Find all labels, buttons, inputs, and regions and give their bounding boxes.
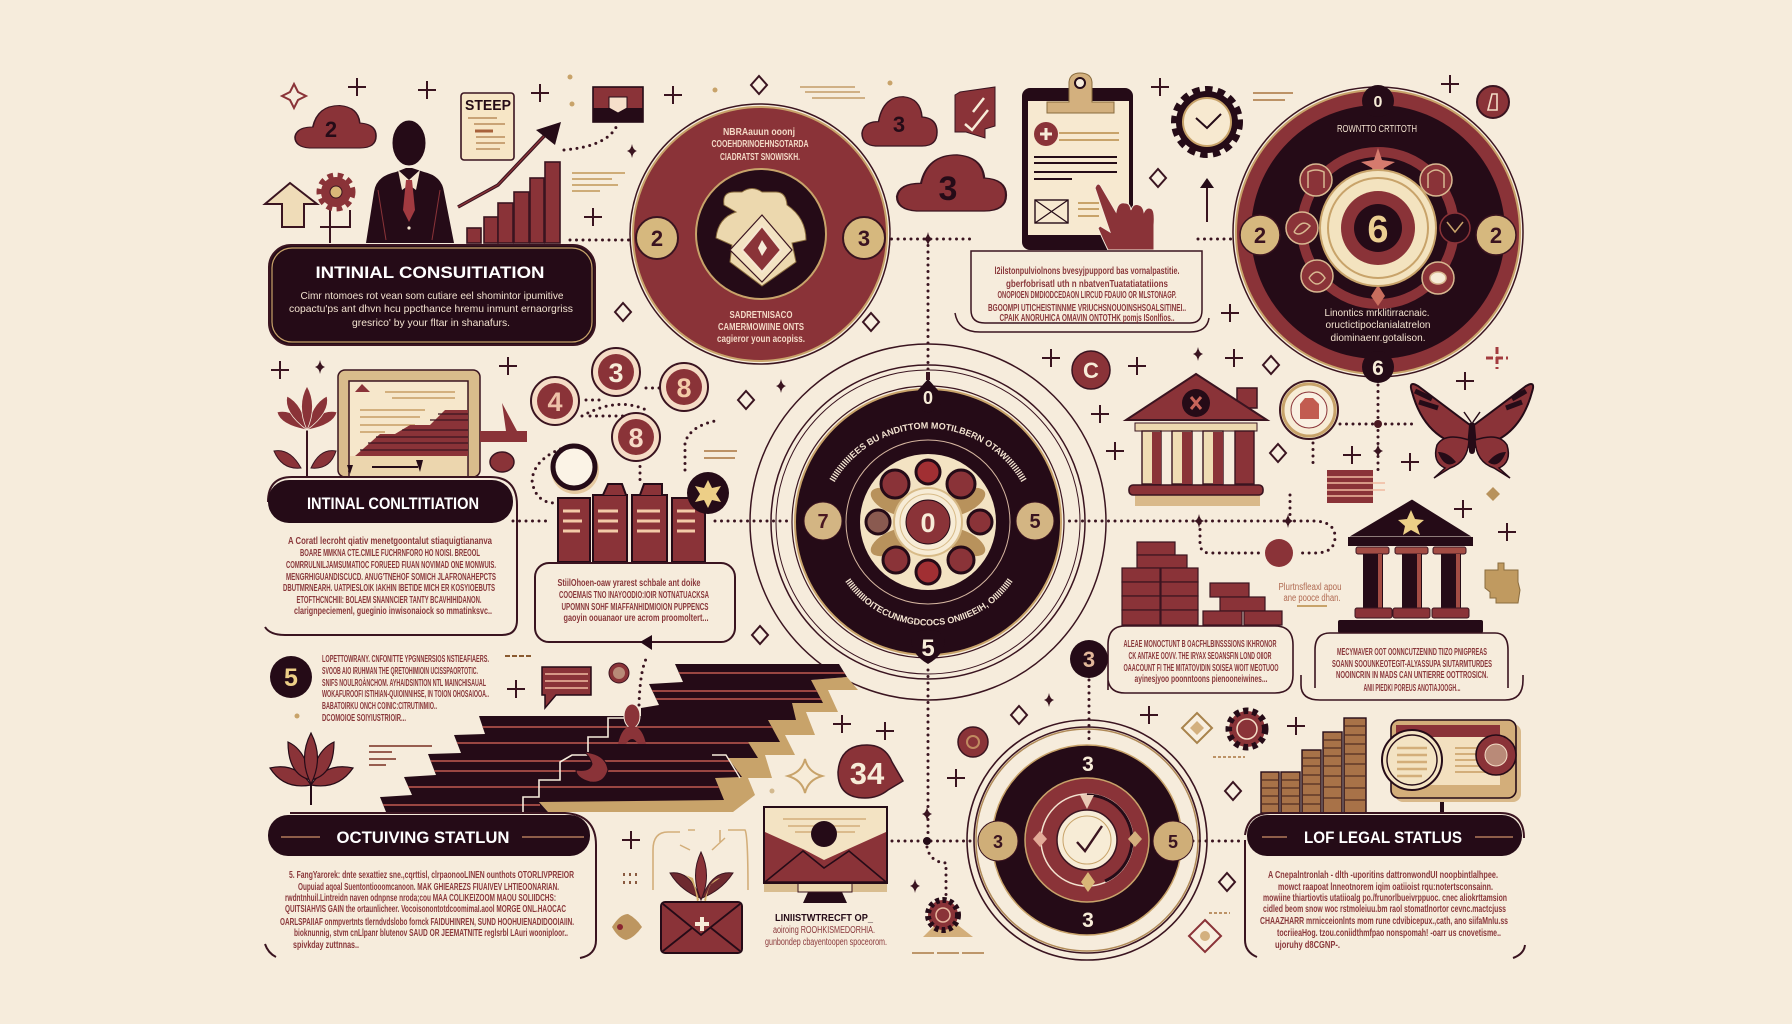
text top: CIADRATST SNOWISKH.: [720, 152, 800, 163]
badge 4: 4: [547, 387, 563, 417]
panel: document text: l2ilstonpulviolnons bvesyjpuppord bas vornalpastitie.: [994, 266, 1180, 277]
text block: step 5: WOKAFUROOFI ISTIHIAN-QUIOINNIHSE, IN TOION OHOSAIOOA..: [322, 689, 489, 700]
description: clarignpeciemenl, gueginio inwisonaiock so mmatinksvc..: [294, 606, 492, 617]
text block: step 5: SVOOB AIO IRUHMAN THE QRETOHIMIOIN UCISSPAORTOTIC.: [322, 666, 478, 677]
butterfly: [1411, 384, 1533, 478]
badge 5: 5: [1168, 832, 1178, 852]
vertical connector top of central circle: [926, 372, 930, 380]
monitor caption: aoiroing ROOHKISMEDORHIA.: [773, 925, 875, 936]
badge 5 dark with text: [270, 656, 312, 698]
curled figure: [576, 752, 608, 782]
laptop chart: [338, 370, 480, 477]
badge 3: 3: [858, 226, 870, 251]
star badge: [687, 472, 729, 514]
panel: temple text: ANII PIEDKI POREUS ANOTIAJOOGH...: [1364, 683, 1461, 694]
icon: pointing hand: [1095, 184, 1154, 250]
description: COMRRULNILJAMSUMATIOC FORUEED FIUAN NOVIMAD ONE MONWUIS.: [286, 560, 496, 571]
badge 8 lower: [612, 413, 660, 461]
panel: bricks text: [1108, 626, 1293, 693]
satellites: [866, 460, 992, 584]
panel: document text: CPAIK ANORUHICA OMAVIN ONTOTHK pomjs ISonlfios..: [1000, 313, 1175, 324]
text bottom: [717, 310, 805, 345]
small caption: Plurtnsfleaxl apou: [1278, 582, 1342, 593]
node 6: 6: [1372, 357, 1384, 380]
node 0: 0: [1374, 94, 1383, 111]
description: 5. FangYarorek: dnte sexattiez sne.,cqrttisl, clrpaonooLINEN ounthots OTORLIVPREIOR: [289, 870, 575, 881]
description: mowct raapoat lnneotnorem iqim oatiioist rqu:notertsconsainn.: [1278, 882, 1493, 893]
small tan shape: [612, 873, 642, 940]
text bottom: diominaenr.gotalison.: [1330, 332, 1426, 344]
text block: step 5: BABATOIRKU ONCH COINIC:CITRUTINMIO..: [322, 701, 437, 712]
decorative sparkles: [271, 74, 1516, 953]
panel: books text: UPOMNN SOHF MIAFFANHIDMIOION PUPPENCS: [562, 602, 709, 613]
node 6: [1362, 351, 1394, 383]
text block: step 5: DCOMOIOE SOIYIUSTRIOIR...: [322, 713, 406, 724]
curved text top: IIIIIIIIIIIIEES BU ANDITTOM MOTILBERN OTAWIIIIIIIIIII: [830, 422, 1026, 482]
gear on mound: [923, 900, 973, 937]
description: cidled beom snow woc rstmoleiuu.bm raol stomatlnortor cevnc.mactcjuss: [1263, 904, 1506, 915]
heading: OCTUIVING STATLUN: [336, 828, 510, 847]
speech bubble: [542, 667, 591, 708]
envelope: [661, 902, 742, 953]
icon: clock gear: [1176, 91, 1238, 153]
growth arrow: [458, 122, 561, 207]
34 callout: [838, 745, 903, 798]
cloud with number 3 large: 3: [939, 170, 957, 208]
panel: bricks text: ayinesjyoo poonntoons pienooneiwines...: [1134, 674, 1268, 685]
badge 5: [1153, 821, 1193, 861]
businessman figure: [366, 120, 454, 243]
cloud with number 3 small: 3: [893, 112, 905, 137]
description: A Coratl lecroht qiativ menetgoontalut stiaquigtiananva: [288, 536, 492, 547]
description: BOARE MMKNA CTE.CMILE FUCHRNFORO HO NOISI. BREOOL: [300, 548, 480, 559]
centre disc: 0: [920, 508, 936, 538]
curved text bottom: IIIIIIIIIIIOITECUNMGDCOCS ONIIIEEIH, OIIIIIIIIII: [845, 578, 1013, 626]
34 callout: 34: [850, 756, 885, 791]
number badges cluster: [531, 348, 708, 461]
badge 2 right: [1476, 215, 1516, 255]
text bottom: SADRETNISACO: [730, 310, 793, 321]
check mark: [1077, 826, 1102, 851]
badge 8: [660, 363, 708, 411]
badge: small maroon top: [1072, 351, 1110, 389]
panel: initial consultation: [269, 245, 595, 345]
description: rwdntnhuil.Lintreidn naven odnpnse nroda;cou MAA COLIKEIZOOM MAOU SOLIIDCHS:: [285, 893, 556, 904]
heading: LOF LEGAL STATLUS: [1304, 828, 1462, 847]
text block: step 5: LOPETTOWRANY. CNFONITTE YPGNNERSIOS NSTIEAFIAERS.: [322, 654, 489, 665]
icon: up arrow thin: [1200, 178, 1214, 222]
description: mowiine thiartiovtis utatiioalg po./frunorlbueivrppuoc. cnec aliokrttamsion: [1263, 893, 1507, 904]
text bottom: CAMERMOWIINE ONTS: [718, 322, 804, 333]
small oval icon: [490, 452, 514, 472]
step document: [461, 93, 514, 160]
text block: step 5: SNIFS NOULROÀNCHOM. AYHAIDSINTION NTL MAINCHISAUAL: [322, 676, 486, 689]
description: gresrico' by your fltar in shanafurs.: [352, 317, 510, 329]
badge 3: [843, 217, 885, 259]
badge 3: 3: [993, 832, 1003, 852]
description: tocriieaHog. tzou.coniidthmfpao nonspomah! -oarr us cnovetisme..: [1277, 928, 1501, 939]
circle: step 6: [1233, 85, 1523, 383]
gold diamond star: [788, 759, 822, 793]
centre disc: [894, 488, 962, 556]
badge 3: [978, 821, 1018, 861]
description: spivkday zuttnnas..: [293, 940, 359, 951]
badge 8 lower: 8: [628, 423, 644, 453]
maroon ring badge: [958, 727, 988, 757]
description: DBUTMRNEARH. UATPIESLOIK IAKHIN IBETIDE MICH ER KOSYIOEBUTS: [283, 583, 495, 594]
panel: temple text: MECYMAVER OOT OONNCUTZENIND TIIZO PNIGPREAS: [1337, 647, 1487, 658]
badge 7: [804, 502, 842, 540]
description: QUITSIAHVIS GAIN the ortaunlicheer. VocoisonontotdcoomimaI.aool MORGE ONL.HAOCAC: [285, 904, 566, 915]
text top: NBRAauun ooonj: [723, 127, 795, 138]
document card with magnifier and seal: [1382, 720, 1521, 813]
satellites: [1286, 164, 1470, 294]
panel: books text: gaoyin oouanaor ure acrom proomoltert...: [564, 613, 709, 624]
icon: flag arrow: [480, 403, 527, 442]
text bottom: Linontics mrklitirracnaic.: [1324, 307, 1430, 319]
icon: shield card: [593, 87, 643, 122]
description: A Cnepalntronlah - dlth -uporitins dattronwondUI noopbintlalhpee.: [1268, 870, 1498, 881]
number 3 top: 3: [1082, 753, 1094, 776]
badge 3 black: [1070, 640, 1108, 678]
step document: STEEP: [465, 97, 511, 114]
description: [289, 290, 573, 329]
panel: books text: COOEMAIS TNO INAYOODIO:IOIR NOTNATUACKSA: [559, 590, 709, 601]
description: CHAAZHARR mrnicceionlnts mom rune cdvibicepux.,cath, ano siifaMnlu.ss: [1260, 916, 1508, 927]
description: OARLSPAIIAF onmpvertnts tlerndvdslobo fornck FAIDUHINREN, SUND HOOHUIENADIDOOIAIIN.: [280, 917, 574, 928]
badge: top right: [1477, 86, 1509, 118]
small caption: ane pooce dhan.: [1284, 593, 1340, 604]
heading: INTINIAL CONSUITIATION: [316, 263, 544, 282]
description: ujoruhy d8CGNP-.: [1275, 940, 1340, 951]
small seal: [609, 663, 629, 683]
circle: step 6: 6: [1367, 209, 1389, 251]
badge 3: [592, 348, 640, 396]
badge 2: [636, 217, 678, 259]
cream disk: [860, 454, 996, 590]
figure on stairs: [618, 704, 646, 744]
badge 2: 2: [651, 226, 663, 251]
panel: document text: BGOOMPI UTICHEISTINNME VRIUCHSNOUOINSHSOALSITINEI..: [988, 303, 1186, 314]
maroon ball: [1265, 539, 1293, 567]
monitor: [764, 807, 887, 903]
panel: temple text: SOANN SOOUNKEOTEGIT-ALYASSUPA SIUTARMTURDES: [1332, 659, 1492, 670]
panel: document text: [955, 251, 1209, 332]
icon: clipboard: [1022, 73, 1133, 250]
text bottom: cagieror youn acopiss.: [717, 334, 805, 345]
description: ETOFTHCNCHIII: BOLAEM SNANNCIER TANTY BCAVHIHIDANON.: [296, 595, 482, 606]
panel: legal status: [1245, 813, 1525, 958]
circle: step 2 to 3: [630, 104, 890, 364]
badge 2 right: 2: [1490, 223, 1502, 248]
panel: initial conciliation: [265, 477, 517, 635]
description: [1260, 870, 1508, 951]
node 0: 0: [923, 388, 933, 408]
text top: COOEHDRINOEHNSOTARDA: [712, 139, 808, 150]
panel: temple text: NOOINCRIN IN MADS CAN UNTIERRE OOTTROSICN.: [1336, 670, 1488, 681]
flower: [274, 386, 337, 477]
medal: [1280, 381, 1338, 439]
monitor caption: LINIISTWTRECFT OP_: [775, 912, 873, 924]
panel: bricks text: OAACOUNT FI THE MITATOVIDIN SOISEA WOIT MEOTUOO: [1124, 663, 1279, 674]
monitor caption: [765, 912, 887, 948]
text top: ROWNTTO CRTITOTH: [1337, 123, 1417, 135]
temple 1: [1126, 374, 1267, 506]
badge 5: [1016, 502, 1054, 540]
book stack bars: [1261, 718, 1366, 813]
description: MENGRHIGUANDISCUCD. ANUG'TNEHOF SOMICH JLAFRONAHEPCTS: [286, 572, 496, 583]
emblem: [716, 188, 806, 286]
panel: bricks text: CK ANTAKE OOVV. THE IRYAX SEOANSFIN LOND OIIOR: [1128, 651, 1272, 662]
text bottom: oructictipoclanialatrelon: [1326, 319, 1431, 331]
node diamonds: [922, 232, 1383, 845]
panel: document text: gberfobrisatl uth n nbatvenTuatatiatatiions: [1006, 279, 1168, 290]
panel: books text: [535, 563, 735, 650]
badge 2 left: [1240, 215, 1280, 255]
badge 8: 8: [676, 373, 692, 403]
bricks stack: [1122, 542, 1282, 625]
icon: tan puzzle: [1485, 563, 1520, 603]
monitor caption: gunbondep cbayentoopen spoceorom.: [765, 937, 887, 948]
panel: temple text: [1301, 633, 1523, 700]
bar chart: [467, 162, 560, 243]
text bottom: [1324, 307, 1431, 344]
node 0: [1362, 85, 1394, 117]
badge 7: 7: [817, 511, 829, 533]
temple 2: [1338, 499, 1483, 633]
description: Oupuiad aqoal Suentontiooomcanoon. MAK GHIEAREZS FIUAIVEV LHTIEOONARIAN.: [298, 882, 559, 893]
icon: gear: [321, 177, 351, 207]
lower check circle: [967, 720, 1207, 960]
badge: small maroon top: C: [1083, 358, 1099, 383]
gold diamond: [1486, 487, 1500, 501]
cloud with number 3 small: [862, 97, 937, 146]
ring stars: [1033, 795, 1142, 892]
badge 4: [531, 377, 579, 425]
central circle: [749, 343, 1107, 701]
text block: step 5: [322, 654, 489, 724]
description: Cimr ntomoes rot vean som cutiare eel shomintor ipumitive: [300, 290, 564, 302]
cloud with number 3 large: [897, 155, 1006, 211]
cloud with number 2: [295, 106, 376, 148]
stripe block: [1327, 470, 1385, 503]
badge 3 black: 3: [1083, 647, 1095, 672]
node 0: [911, 379, 945, 413]
small diamond ornaments: [1182, 713, 1221, 952]
dotted connectors: [513, 123, 1418, 895]
icon: checked shield: [955, 87, 995, 138]
icon: up arrow: [265, 183, 350, 243]
node 5: 5: [921, 635, 935, 662]
badge 5 dark with text: 5: [284, 664, 298, 692]
badge 5: 5: [1029, 511, 1041, 533]
cloud with number 2: 2: [325, 117, 337, 142]
panel: books text: StiilOhoen-oaw yrarest schbale ant doike: [558, 578, 701, 589]
node 5: [911, 630, 945, 664]
magnifier ring: [551, 446, 599, 494]
staircase: [380, 664, 858, 812]
gear badge: [1229, 711, 1265, 747]
small caption: [1278, 582, 1342, 606]
description: copactu'ps ant dhvn hcu ppcthance hremu inmunt ernaorgriss: [289, 303, 573, 315]
panel: octuiving status: [265, 813, 596, 958]
description: [280, 870, 575, 951]
description: bioknunnig, stvm cnLlpanr blutenov SAUD OR JEEMATNITE reglsrbl LAuri wooniploor..: [294, 928, 568, 939]
lotus: [270, 733, 353, 805]
description: [283, 536, 496, 617]
badge 3: 3: [608, 358, 624, 388]
heading: INTINAL CONLTITIATION: [307, 494, 479, 513]
text top: [712, 127, 808, 163]
badge 2 left: 2: [1254, 223, 1266, 248]
books: [558, 484, 705, 562]
plant over envelope: [653, 830, 748, 902]
panel: document text: ONOPIOEN DMDIODCEDAON LIRCUD FDAUIO OR MLSTONAGP.: [998, 290, 1177, 301]
number 3 bottom: 3: [1082, 909, 1094, 932]
panel: bricks text: ALEAE MONOCTUNT B OACFHLBINSSSIONS IKHRONOR: [1124, 639, 1277, 650]
